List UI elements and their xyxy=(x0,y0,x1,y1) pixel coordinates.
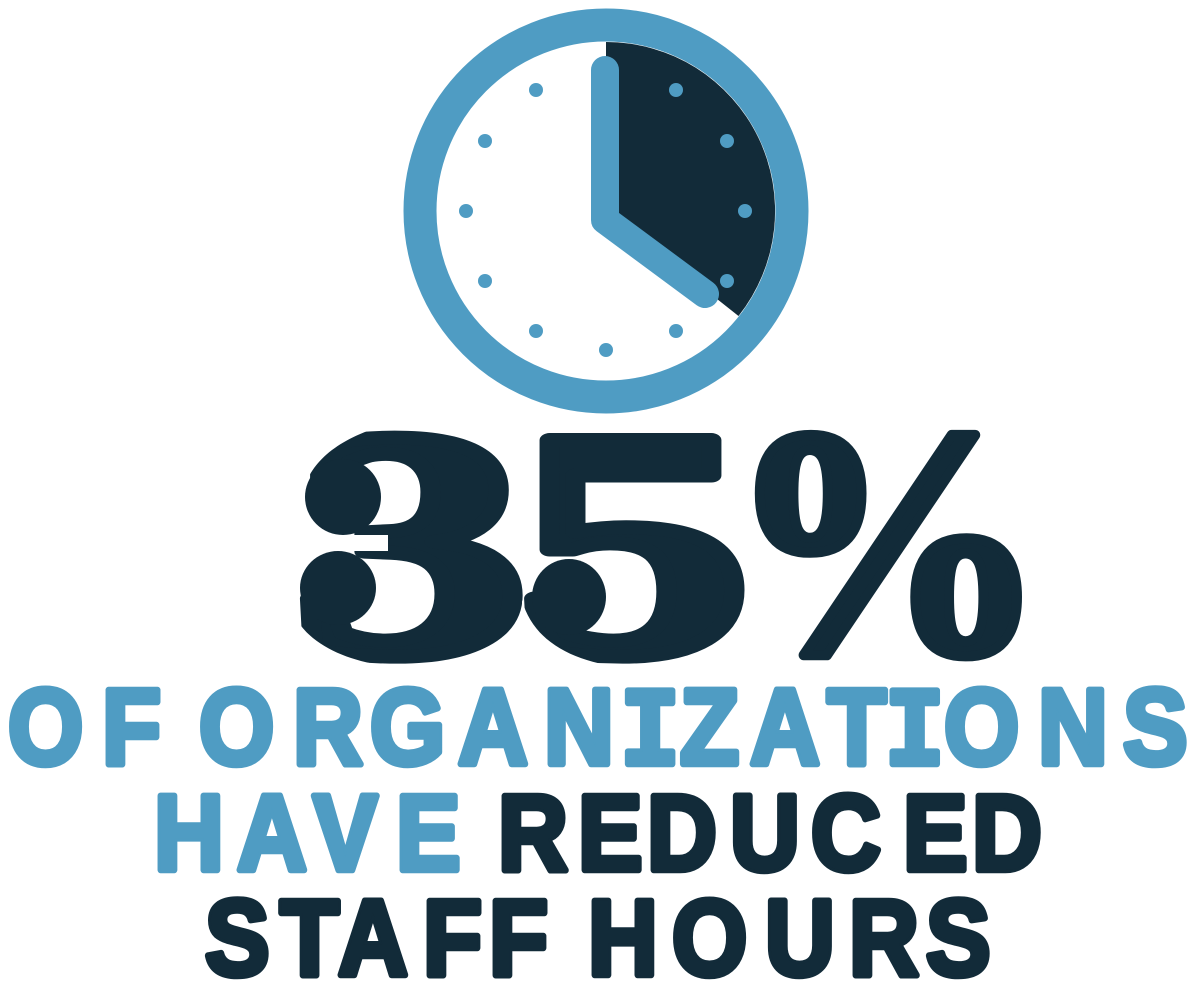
big number: 35%: 35 xyxy=(292,363,752,724)
clock hands xyxy=(605,70,705,294)
clock ring and face xyxy=(420,25,792,397)
caption line 2 xyxy=(154,772,1042,893)
caption line 3 xyxy=(205,877,991,985)
hour dots xyxy=(459,83,752,357)
caption line 2: HAVE xyxy=(154,772,461,893)
caption line 1: ORGANIZATIONS xyxy=(199,666,1188,798)
icon: clock showing 35 percent of the hour xyxy=(420,25,792,397)
caption line 2: REDUCED xyxy=(498,772,1042,893)
big number: 35%: % xyxy=(727,361,1047,723)
dark elapsed wedge xyxy=(606,42,775,316)
big number: 35% xyxy=(288,361,1047,724)
caption line 1: OF xyxy=(8,666,161,787)
